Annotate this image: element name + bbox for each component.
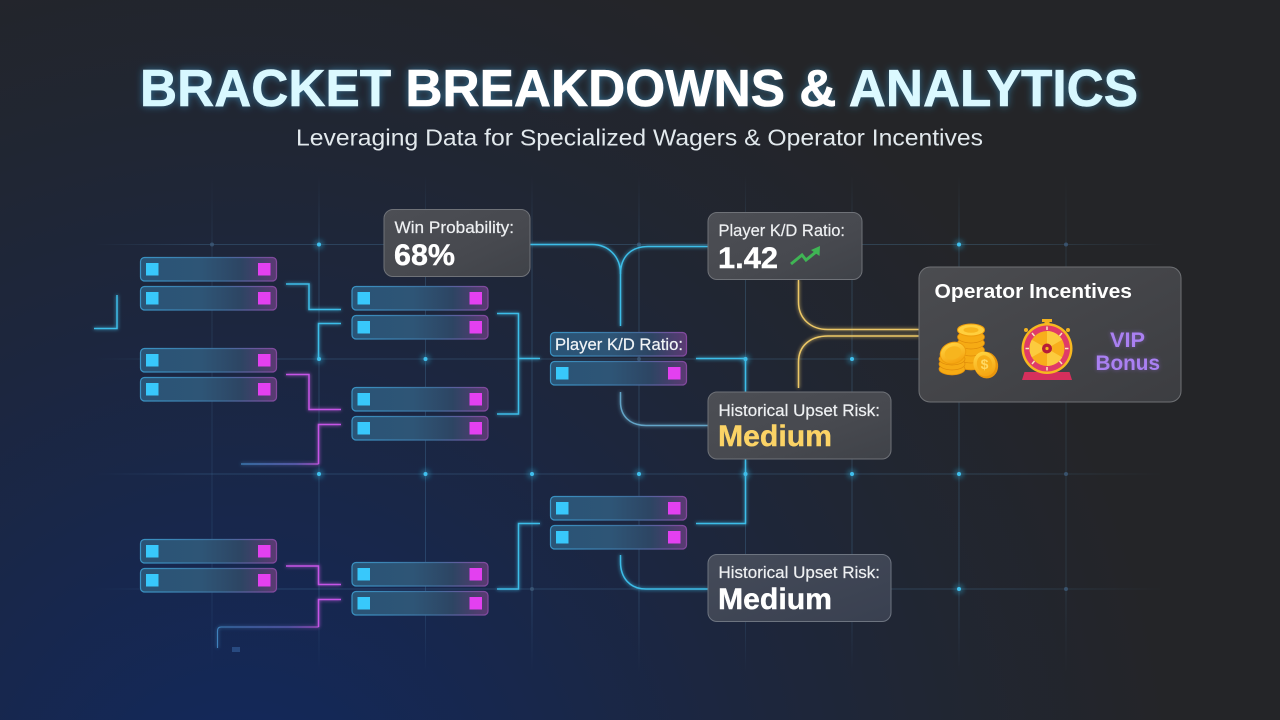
VIP bonus label: Bonus bbox=[1096, 352, 1160, 375]
connector lines: magenta bbox=[218, 374, 341, 648]
panel: historical upset risk, medium gold: Historical Upset Risk: bbox=[718, 402, 880, 420]
VIP bonus label bbox=[1096, 329, 1160, 375]
panel: win probability: Win Probability: bbox=[394, 219, 514, 237]
VIP bonus label: VIP bbox=[1110, 329, 1145, 352]
panel: historical upset risk, medium white: Historical Upset Risk: bbox=[718, 564, 880, 582]
panel: historical upset risk, medium white bbox=[708, 554, 891, 622]
icon: gold coins bbox=[937, 324, 1002, 382]
small marker bbox=[232, 647, 240, 652]
panel: win probability bbox=[384, 210, 530, 276]
icon: gold coins: $ bbox=[981, 356, 989, 372]
panel: player K/D ratio: 1.42 bbox=[718, 242, 778, 275]
panel: historical upset risk, medium gold bbox=[708, 392, 891, 459]
bracket column 1 bbox=[140, 258, 276, 592]
bracket column 3 bbox=[550, 332, 686, 549]
panel: historical upset risk, medium gold: Medium bbox=[718, 420, 832, 453]
connector lines: gold bbox=[798, 280, 919, 388]
background grid bbox=[95, 175, 1165, 672]
icon: prize wheel bbox=[1022, 319, 1072, 380]
operator incentives heading: Operator Incentives bbox=[934, 280, 1132, 303]
panel: win probability: 68% bbox=[394, 239, 455, 272]
bracket column 2 bbox=[352, 286, 488, 615]
panel: historical upset risk, medium white: Medium bbox=[718, 583, 832, 616]
title: BRACKET BREAKDOWNS & ANALYTICS bbox=[140, 60, 1138, 118]
panel: player K/D ratio bbox=[708, 212, 862, 280]
connector lines: cyan bbox=[94, 244, 746, 589]
icon: green trend arrow bbox=[791, 246, 820, 264]
subtitle: Leveraging Data for Specialized Wagers & Operator Incentives bbox=[296, 124, 983, 150]
bracket column 3: Player K/D Ratio: bbox=[555, 336, 683, 354]
panel: operator incentives bbox=[919, 267, 1181, 402]
panel: player K/D ratio: Player K/D Ratio: bbox=[718, 222, 845, 240]
